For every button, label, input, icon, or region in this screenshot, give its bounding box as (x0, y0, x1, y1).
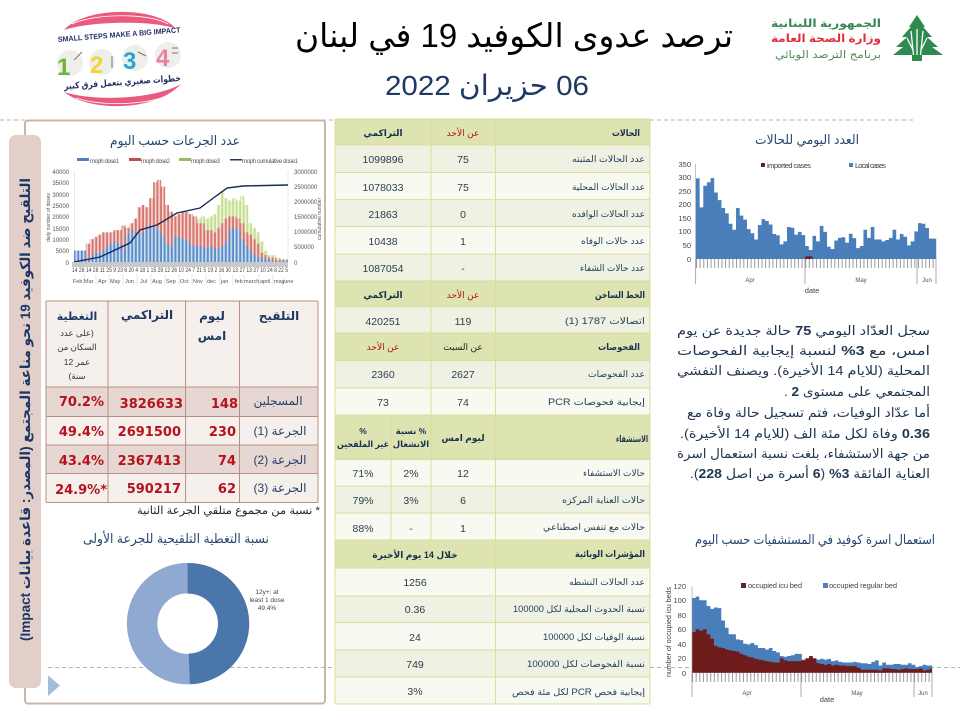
section: tests: الفحوصات (598, 342, 640, 353)
table header (57, 308, 299, 381)
text block: daily summary: سجل العدّاد اليومي 75 حالة جديدة عن يوم (677, 323, 930, 339)
section: cases (335, 119, 650, 281)
row: dose 2: 2367413 (118, 454, 181, 469)
section: cases: 1078033 (363, 182, 404, 194)
ministry logo text: برنامج الترصد الوبائي (775, 49, 881, 61)
table header: سنة) (68, 371, 86, 381)
section: tests: إيجابية فحوصات PCR (548, 397, 645, 408)
section: hospitalization: % (359, 426, 367, 436)
chart: daily vaccine doses: 0 (66, 261, 70, 267)
chart: daily vaccine doses: moph dose1 (90, 159, 120, 165)
chart: occupied hospital beds: 0 (682, 669, 686, 678)
date subtitle: 06 حزيران 2022 (385, 70, 589, 102)
chart: daily vaccine doses: dec (207, 279, 216, 285)
row: dose 1 (59, 424, 306, 440)
chart: first dose coverage donut (142, 563, 285, 684)
chart: daily vaccine doses: march (244, 279, 259, 285)
chart: daily vaccine doses: Nov (193, 279, 203, 285)
chart: daily vaccine doses: 0 (294, 261, 298, 267)
section: tests: 2627 (451, 369, 475, 381)
heading: daily doses chart: عدد الجرعات حسب اليوم (110, 133, 240, 149)
chart: daily vaccine doses: 14 28 14 28 11 25 9 23 6 20 4 18 1 15 29 12 26 10 24 7 21 5 19 2 16 30 13 27 13 27 10 24 8 22 5 (72, 268, 289, 274)
sidebar: vaccination heading: التلقيح ضد الكوفيد 19 نحو مناعة المجتمع (المصدر: قاعدة بيانات Impact) (17, 178, 34, 641)
section: hospitalization: 3% (403, 495, 419, 507)
section: tests: عن السبت (443, 342, 483, 352)
chart: daily vaccine doses: cumulative number (317, 197, 323, 240)
row: dose 2: الجرعة (2) (254, 453, 306, 468)
row: dose 3: 62 (218, 482, 236, 497)
chart: first dose coverage donut: least 1 dose (249, 597, 285, 604)
section: cases: 0 (460, 209, 466, 221)
section: hospitalization: 12 (457, 468, 469, 480)
chart: daily cases: Local cases (855, 161, 886, 170)
heading: daily cases chart: العدد اليومي للحالات (755, 132, 859, 148)
chart: daily vaccine doses: 5000 (56, 249, 70, 255)
chart: daily vaccine doses: Feb (73, 279, 82, 285)
section: cases: عدد حالات الوفاه (581, 236, 645, 246)
chart: daily vaccine doses: feb (235, 279, 243, 285)
row: dose 1: 230 (209, 425, 236, 440)
chart: daily vaccine doses: 25000 (52, 204, 70, 210)
section: hospitalization: - (409, 523, 413, 535)
chart: daily cases: date (805, 286, 819, 295)
chart: daily cases: 150 (678, 214, 691, 223)
chart: occupied hospital beds: 100 (673, 596, 686, 605)
top dashed line (0, 119, 915, 121)
logo: small steps campaign: خطوات صغيري بتعمل فرق كبير (63, 73, 181, 92)
section: hospitalization: غير الملقحين (337, 439, 389, 450)
section: epidemiological indicators: عدد الحالات النشطه (569, 577, 645, 587)
sidebar: vaccination heading (9, 135, 41, 688)
row: registered: المسجلين (253, 394, 303, 409)
logo: small steps campaign: 3 (123, 48, 136, 75)
section: hospitalization: حالات مع تنفس اصطناعي (543, 522, 645, 532)
ministry logo text: الجمهورية اللبنانية (771, 18, 881, 30)
section: hospitalization: حالات العناية المركزه (562, 495, 645, 505)
heading: hospital beds chart: استعمال اسرة كوفيد في المستشفيات حسب اليوم (695, 532, 935, 548)
row: dose 1: 2691500 (118, 425, 181, 440)
section: cases: عدد الحالات الوافده (572, 209, 645, 219)
table header: امس (198, 329, 226, 343)
table header: (على عدد (60, 328, 94, 338)
chart: daily cases: 300 (678, 173, 691, 182)
chart: daily vaccine doses: May (110, 279, 121, 285)
chart: daily vaccine doses: jan (220, 279, 228, 285)
row: dose 3: الجرعة (3) (254, 481, 306, 496)
section: hospitalization: الانشغال (393, 439, 429, 449)
row: dose 2 (59, 453, 306, 469)
section: cases: عدد الحالات المحلية (572, 182, 645, 192)
section: cases: 10438 (368, 236, 398, 248)
section: epidemiological indicators: نسبة الوفيات لكل 100000 (543, 632, 645, 642)
text block: daily summary: المجتمعي على مستوى 2 . (784, 384, 930, 400)
chart: daily vaccine doses: 35000 (52, 181, 70, 187)
chart: daily vaccine doses: 3000000 (294, 170, 318, 176)
chart: occupied hospital beds: number of occupied icu beds (664, 587, 673, 677)
section: epidemiological indicators: 1256 (403, 577, 427, 589)
logo: small steps campaign: 4 (156, 45, 170, 72)
chart: daily vaccine doses: moph dose2 (141, 159, 171, 165)
chart: daily vaccine doses: Jul (140, 279, 147, 285)
chart: daily vaccine doses: may (274, 279, 285, 285)
section: hospitalization: الاستشفاء (616, 434, 648, 444)
chart: daily vaccine doses: 20000 (52, 215, 70, 221)
section: cases: 75 (457, 154, 469, 166)
chart: occupied hospital beds: 80 (678, 611, 686, 620)
table header: عمر 12 (64, 357, 90, 367)
chart: daily vaccine doses: 1000000 (294, 230, 318, 236)
chart: first dose coverage donut: 49.4% (258, 605, 276, 612)
chart: daily cases: May (855, 278, 867, 284)
section: cases: 1099896 (363, 154, 404, 166)
section: hospitalization: حالات الاستشفاء (583, 468, 645, 478)
section: cases: 21863 (368, 209, 398, 221)
section: hospitalization: 1 (460, 523, 466, 535)
section: tests (335, 333, 650, 409)
row: dose 1: 49.4% (59, 425, 104, 440)
logo: small steps campaign: SMALL STEPS MAKE A BIG IMPACT (57, 25, 181, 44)
section: epidemiological indicators (335, 540, 650, 698)
section: hotline: اتصالات 1787 (1) (565, 316, 645, 326)
chart: daily cases: 100 (678, 227, 691, 236)
table footnote: * نسبة من مجموع متلقي الجرعة الثانية (137, 505, 321, 517)
section: hotline: الخط الساخن (595, 290, 645, 301)
chart: occupied hospital beds: May (851, 691, 863, 697)
chart: daily vaccine doses: 500000 (294, 245, 315, 251)
chart: daily cases: 350 (678, 160, 691, 169)
row: dose 3: 590217 (127, 482, 181, 497)
section: hospitalization: ليوم امس (441, 433, 485, 444)
chart: occupied hospital beds: 40 (678, 640, 686, 649)
chart: daily vaccine doses: moph dose3 (191, 159, 221, 165)
chart: daily vaccine doses (46, 158, 323, 285)
row: dose 2: 43.4% (59, 454, 104, 469)
table header: التراكمي (121, 308, 173, 322)
section: epidemiological indicators: إيجابية فحص PCR لكل مئة فحص (512, 687, 645, 698)
row: dose 3: 24.9%* (55, 483, 107, 498)
chart: daily vaccine doses: moph cumulative dose1 (242, 159, 299, 165)
section: cases: 75 (457, 182, 469, 194)
chart: occupied hospital beds: 60 (678, 625, 686, 634)
chart: daily cases (678, 160, 936, 295)
section: epidemiological indicators: 0.36 (405, 604, 425, 616)
section: epidemiological indicators: نسبة الحدوث المحلية لكل 100000 (513, 604, 645, 614)
table header: ليوم (199, 309, 225, 324)
row: registered: 70.2% (59, 395, 104, 410)
title: ترصد عدوى الكوفيد 19 في لبنان (295, 17, 733, 55)
section: epidemiological indicators: 24 (409, 632, 421, 644)
chart: first dose coverage donut: 12y+: at (255, 589, 279, 596)
logo: small steps campaign: 2 (90, 52, 103, 79)
section: hotline: التراكمي (363, 290, 403, 301)
section: hospitalization: 71% (352, 468, 374, 480)
chart: daily vaccine doses: 1500000 (294, 215, 318, 221)
chart: occupied hospital beds (664, 581, 932, 704)
table header: السكان من (57, 342, 97, 352)
section: hotline: 420251 (365, 316, 401, 328)
row: dose 1: الجرعة (1) (254, 424, 306, 439)
section: hotline: 119 (455, 316, 472, 328)
chart: daily cases: 0 (687, 255, 691, 264)
ministry logo text (771, 18, 881, 61)
row: registered (59, 394, 303, 412)
table: surveillance indicators (335, 119, 650, 704)
chart: daily vaccine doses: april (260, 279, 270, 285)
chart: daily vaccine doses: Oct (180, 279, 189, 285)
chart: daily vaccine doses: Sep (166, 279, 176, 285)
chart: daily vaccine doses: 30000 (52, 193, 70, 199)
section: hospitalization: % نسبة (396, 426, 427, 436)
section: hospitalization: 79% (352, 495, 374, 507)
icon: cedar tree (893, 15, 943, 61)
chart: daily vaccine doses: 2500000 (294, 185, 318, 191)
chart: daily vaccine doses: Apr (98, 279, 107, 285)
chart: daily vaccine doses: Aug (152, 279, 162, 285)
section: hotline: عن الأحد (447, 289, 479, 300)
section: hospitalization: 6 (460, 495, 466, 507)
section: epidemiological indicators: خلال 14 يوم الأخيرة (372, 549, 458, 561)
section: hospitalization (335, 415, 650, 535)
row: registered: 3826633 (120, 397, 183, 412)
text block: daily summary: امس، مع 3% لنسبة إيجابية الفحوصات (677, 343, 930, 359)
section: epidemiological indicators: نسبة الفحوصات لكل 100000 (527, 659, 645, 669)
chart: daily vaccine doses: june (282, 279, 293, 285)
text block: daily summary: من جهة الاستشفاء، بلغت نسبة استعمال اسرة (677, 446, 930, 462)
chart: occupied hospital beds: date (820, 695, 834, 704)
section: tests: عن الأحد (367, 341, 399, 352)
text block: daily summary: العناية الفائقة 3% (6 أسرة من اصل 228). (690, 465, 930, 482)
row: dose 3 (55, 481, 306, 498)
row: dose 2: 74 (218, 454, 236, 469)
section: hospitalization: 88% (352, 523, 374, 535)
table header: التغطية (57, 311, 97, 323)
chart: daily cases: imported cases (767, 161, 811, 170)
section: tests: 73 (377, 397, 389, 409)
section: cases: عدد حالات الشفاء (580, 263, 645, 273)
section: cases: 1087054 (363, 263, 404, 275)
bottom dashed line (48, 666, 960, 668)
logo: small steps campaign (57, 12, 181, 106)
logo: small steps campaign: 1 (57, 54, 70, 81)
chart: daily cases: Jun (922, 278, 932, 284)
chart: occupied hospital beds: occupied icu bed (748, 581, 802, 590)
section: cases: عدد الحالات المثبته (572, 154, 645, 164)
ministry logo text: وزارة الصحة العامة (771, 33, 881, 45)
section: cases: الحالات (612, 128, 640, 138)
section: epidemiological indicators: 3% (407, 686, 423, 698)
row: registered: 148 (211, 397, 238, 412)
chart: daily vaccine doses: Mar (84, 279, 94, 285)
chart: daily cases: 250 (678, 187, 691, 196)
chart: occupied hospital beds: Apr (742, 691, 752, 697)
section: tests: 74 (457, 397, 469, 409)
chart: occupied hospital beds: Jun (918, 691, 928, 697)
section: hotline (335, 281, 650, 333)
chart: occupied hospital beds: 120 (673, 582, 686, 591)
text block: daily summary: أما عدّاد الوفيات، فتم تسجيل حالة وفاة مع (687, 404, 930, 421)
chart: daily vaccine doses: 2000000 (294, 200, 318, 206)
section: hospitalization: 2% (403, 468, 419, 480)
heading: first dose coverage: نسبة التغطية التلقيحية للجرعة الأولى (83, 530, 269, 547)
chart: daily vaccine doses: 40000 (52, 170, 70, 176)
section: cases: التراكمي (363, 128, 403, 139)
chart: daily cases: 200 (678, 200, 691, 209)
table: vaccination summary (46, 301, 318, 502)
section: cases: 1 (460, 236, 466, 248)
text block: daily summary (677, 323, 930, 482)
chart: daily cases: Apr (745, 278, 755, 284)
section: tests: 2360 (371, 369, 395, 381)
chart: daily vaccine doses: daily number of doses (46, 193, 52, 242)
chart: occupied hospital beds: occupied regular bed (829, 581, 897, 590)
text block: daily summary: 0.36 وفاة لكل مئة الف (للايام 14 الأخيرة). (680, 425, 930, 442)
section: epidemiological indicators: 749 (406, 659, 424, 671)
text block: daily summary: المحلية (للايام 14 الأخيرة). ويصنف التفشي (677, 362, 930, 379)
section: tests: عدد الفحوصات (588, 369, 645, 379)
chart: occupied hospital beds: 20 (678, 654, 686, 663)
section: cases: - (461, 263, 465, 275)
chart: daily vaccine doses: 15000 (52, 227, 70, 233)
section: cases: عن الأحد (447, 127, 479, 138)
icon: play triangle (48, 676, 60, 696)
chart: daily vaccine doses: 10000 (52, 238, 70, 244)
table header: التلقيح (259, 309, 299, 323)
chart: daily vaccine doses: Jun (125, 279, 134, 285)
chart: daily cases: 50 (683, 241, 691, 250)
section: epidemiological indicators: المؤشرات الوبائية (575, 549, 645, 560)
